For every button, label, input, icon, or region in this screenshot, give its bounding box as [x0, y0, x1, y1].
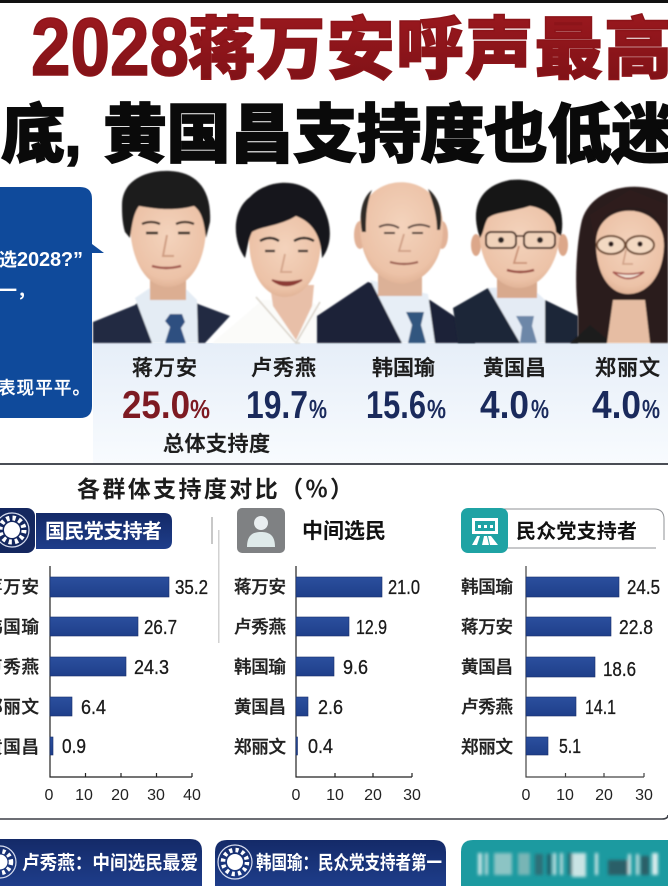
values: 14.1 [585, 697, 616, 719]
portrait: 卢秀燕 [212, 183, 358, 343]
axis ticks: 10 [75, 787, 93, 804]
overall support percentages: % [531, 394, 549, 424]
portrait: 郑丽文 [570, 187, 668, 343]
overall support percentages: 25.0 [122, 384, 190, 427]
axis ticks [292, 787, 421, 804]
badge: TPP supporters: 民众党支持者 [516, 515, 637, 544]
values: 2.6 [318, 697, 343, 719]
category labels: 韩国瑜 [234, 654, 286, 679]
label: overall support: 总体支持度 [163, 428, 270, 458]
candidate names: 卢秀燕 [251, 352, 316, 382]
axis ticks: 20 [364, 787, 382, 804]
values: 26.7 [144, 617, 177, 639]
panel: overall support background [93, 343, 668, 464]
category labels: 郑丽文 [461, 734, 513, 759]
bars [296, 577, 382, 755]
axis ticks: 0 [522, 787, 531, 804]
portrait: 黄国昌 [453, 180, 578, 343]
badge: middle voters [237, 508, 386, 553]
callout text: 选2028?” [0, 246, 83, 272]
bars [526, 577, 619, 755]
candidate names: 黄国昌 [483, 352, 546, 382]
portrait: 韩国瑜 [317, 182, 475, 343]
axis ticks: 0 [45, 787, 54, 804]
values: 6.4 [81, 697, 106, 719]
category labels: 韩国瑜 [461, 574, 514, 599]
candidate names [132, 352, 660, 382]
callout button: 卢秀燕: 卢秀燕：中间选民最爱 [22, 848, 198, 875]
section divider [0, 815, 668, 819]
icon: TPP emblem [472, 518, 498, 545]
overall support percentages: % [642, 394, 660, 424]
candidate names: 蒋万安 [132, 352, 197, 382]
overall support percentages: 4.0 [480, 384, 529, 427]
callout text: 一， [0, 277, 35, 303]
callout button: 卢秀燕 [0, 839, 202, 886]
values: 12.9 [356, 617, 387, 639]
values: 18.6 [603, 659, 636, 681]
values: 5.1 [559, 736, 581, 758]
category labels: 黄国昌 [234, 694, 286, 719]
badge: KMT supporters: 国民党支持者 [45, 515, 162, 544]
axis ticks: 30 [635, 787, 653, 804]
values [62, 577, 208, 758]
portrait: 蒋万安 [93, 171, 230, 343]
axis ticks: 0 [292, 787, 301, 804]
category labels: 黄国昌 [461, 654, 513, 679]
callout: blue speech box [0, 187, 104, 418]
values: 35.2 [175, 577, 208, 599]
candidate names: 韩国瑜 [372, 352, 435, 382]
chart: middle voters [234, 566, 421, 804]
section divider [0, 463, 668, 465]
values: 21.0 [388, 577, 420, 599]
title: red headline: 2028 [31, 2, 189, 93]
values: 24.5 [627, 577, 660, 599]
callout button: 韩国瑜 [215, 840, 446, 886]
values: 22.8 [619, 617, 653, 639]
overall support percentages: 4.0 [592, 384, 641, 427]
subtitle: black headline: 黄国昌支持度也低迷 [103, 84, 668, 176]
axis ticks: 10 [326, 787, 344, 804]
callout button: blurred TPP note [461, 840, 668, 886]
overall support percentages: % [190, 394, 210, 424]
axis ticks: 20 [595, 787, 613, 804]
subtitle: black headline: , [64, 98, 82, 170]
overall support percentages: % [427, 394, 446, 424]
values [559, 577, 660, 758]
badge: middle voters: 中间选民 [302, 515, 386, 545]
badge: KMT supporters [0, 508, 172, 553]
callout text [0, 246, 90, 400]
category labels [461, 574, 514, 759]
values: 0.9 [62, 736, 86, 758]
axis ticks: 40 [183, 787, 201, 804]
values: 0.4 [308, 736, 333, 758]
axis ticks: 10 [556, 787, 574, 804]
subtitle: black headline: 底 [1, 84, 65, 176]
category labels: 郑丽文 [234, 734, 286, 759]
chart: TPP supporters [461, 566, 660, 804]
bars [50, 577, 169, 755]
axis ticks [45, 787, 201, 804]
callout button: 韩国瑜: 韩国瑜：民众党支持者第一 [256, 848, 442, 875]
values: 9.6 [343, 657, 368, 679]
overall support percentages: 15.6 [366, 384, 426, 427]
overall support percentages [122, 384, 660, 427]
divider lines [211, 517, 213, 544]
axis ticks: 30 [147, 787, 165, 804]
axis ticks [522, 787, 653, 804]
axis ticks: 20 [111, 787, 129, 804]
axis ticks: 30 [403, 787, 421, 804]
category labels: 卢秀燕 [234, 614, 286, 639]
values: 24.3 [134, 657, 169, 679]
chart: KMT supporters [0, 566, 208, 804]
overall support percentages: % [309, 394, 327, 424]
overall support percentages: 19.7 [246, 384, 308, 427]
callout text: 表现平平。 [0, 375, 90, 400]
badge: TPP supporters [461, 508, 664, 553]
top border [0, 0, 668, 3]
category labels: 蒋万安 [461, 614, 513, 639]
values [308, 577, 420, 758]
category labels [234, 574, 286, 759]
candidate names: 郑丽文 [595, 352, 660, 382]
category labels: 卢秀燕 [461, 694, 513, 719]
category labels [0, 574, 40, 759]
category labels: 蒋万安 [234, 574, 286, 599]
heading: group comparison: 各群体支持度对比（%） [77, 470, 353, 504]
